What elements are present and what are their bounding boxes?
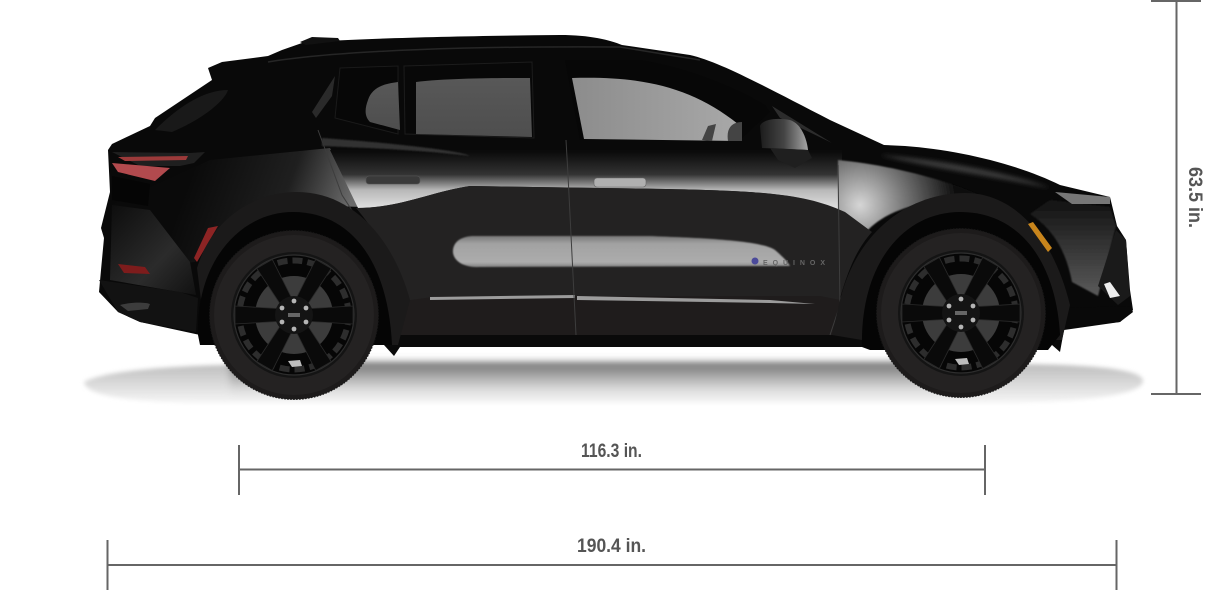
rear glass: [155, 90, 228, 132]
rocker sill: [396, 296, 866, 335]
front fender reflection: [838, 160, 990, 232]
rear door handle: [366, 176, 420, 184]
car body silhouette: [99, 35, 1133, 356]
front window: [565, 60, 770, 140]
rear windows: [335, 66, 398, 134]
front grille: [1098, 230, 1130, 305]
quarter window detail: [312, 76, 335, 118]
front wheel arch: [832, 193, 1070, 340]
EQUINOX badge: EQUINOX: [763, 260, 825, 267]
length bracket: [107, 540, 1117, 590]
ground shadow: [84, 362, 1143, 403]
front quarter glass: [772, 106, 832, 143]
rear taillight: [112, 163, 170, 181]
rear dark tail: [112, 176, 150, 206]
roof line: [268, 47, 700, 62]
rear wheel arch: [197, 192, 410, 345]
door seams: [318, 130, 840, 335]
front amber marker: [1028, 222, 1052, 252]
height dimension: [1151, 1, 1205, 394]
door reflection: [330, 150, 842, 212]
wheelbase bracket: [239, 445, 985, 495]
roof spoiler fin: [300, 37, 340, 45]
hood highlight: [880, 155, 1050, 188]
height label: 63.5 in.: [1184, 167, 1205, 228]
front lower bumper: [1062, 306, 1133, 328]
wheelbase label: 116.3 in.: [581, 441, 642, 462]
chrome sill strip: [430, 295, 815, 304]
front wheel: [876, 228, 1046, 398]
front nose surface: [1030, 200, 1116, 296]
overall length dimension: [107, 536, 1117, 590]
under-sill dark: [390, 335, 870, 347]
EQUINOX badge: [752, 258, 825, 267]
rear side reflector: [194, 226, 218, 262]
car: [99, 35, 1133, 400]
rear quarter panel: [112, 148, 362, 270]
front headlight: [1055, 192, 1110, 204]
side mirror: [760, 119, 812, 168]
door highlight band: [453, 236, 790, 267]
fog light: [1104, 282, 1120, 298]
rear wheel: [210, 230, 378, 400]
rear bumper: [99, 280, 198, 332]
height bracket: [1151, 1, 1201, 394]
front seat silhouette: [702, 122, 742, 141]
length label: 190.4 in.: [577, 536, 646, 557]
lower rear panel: [110, 205, 196, 295]
wheelbase dimension: [239, 441, 985, 495]
front door handle: [594, 178, 646, 187]
rear bumper detail: [120, 303, 150, 311]
lower door panel: [356, 186, 872, 305]
rear taillight bar: [112, 152, 205, 166]
belt line highlight: [322, 138, 470, 156]
lower tail reflector: [118, 264, 150, 274]
